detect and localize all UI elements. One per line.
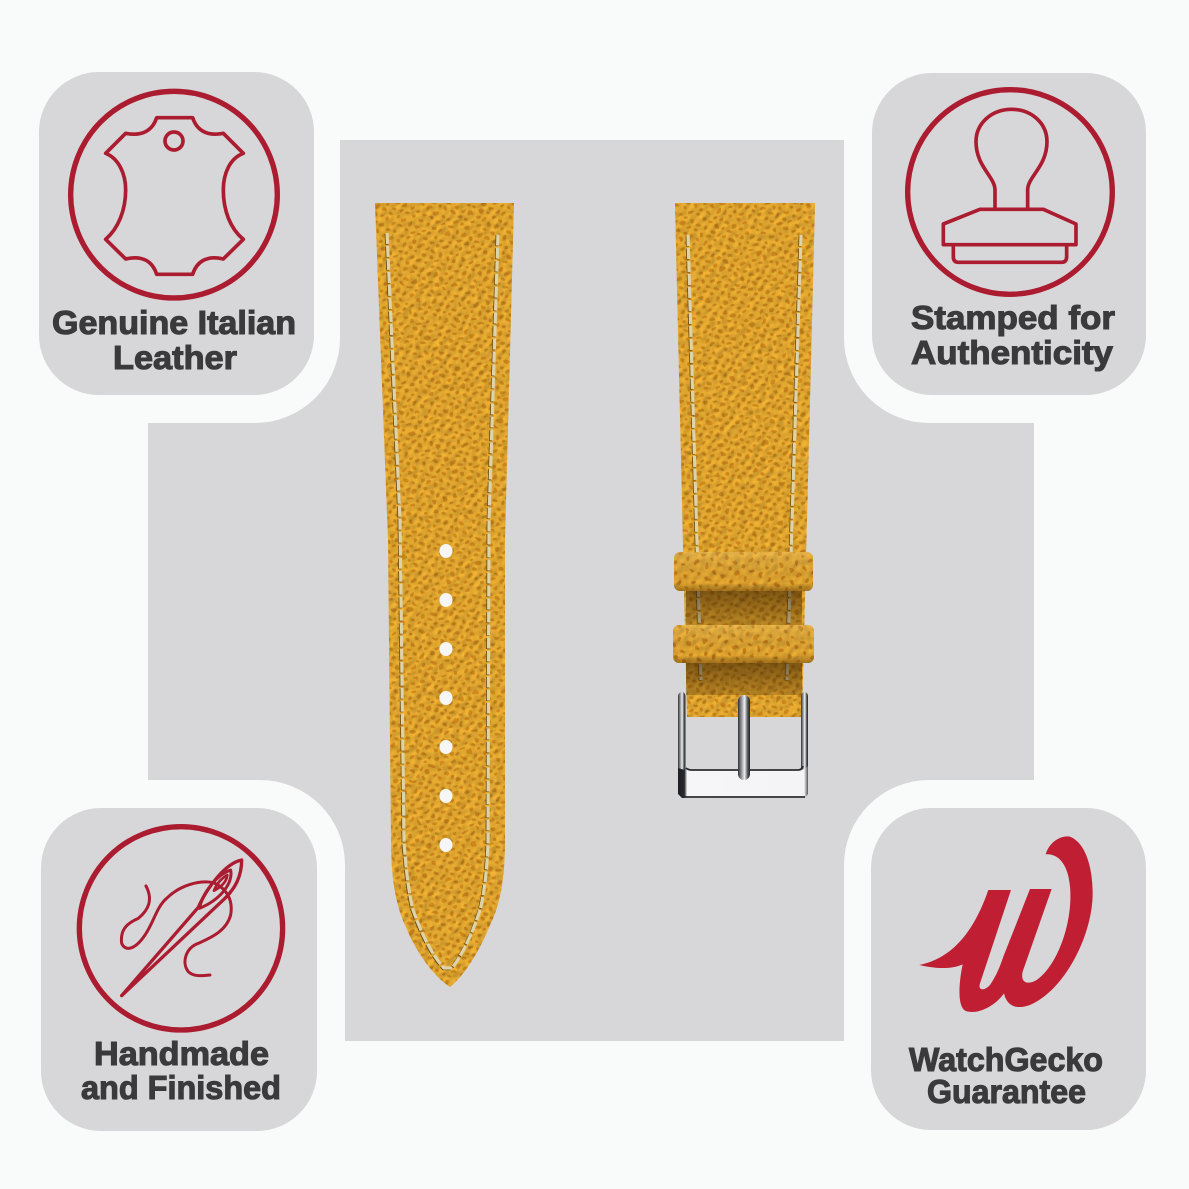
panel: handmade and finished xyxy=(41,808,317,1131)
leather texture: long strap xyxy=(375,203,514,987)
text: stamped for authenticity xyxy=(911,299,1115,371)
icon: needle and thread in circle xyxy=(79,827,283,1030)
leather texture: buckle strap xyxy=(675,203,815,717)
metal buckle xyxy=(678,692,808,798)
white halo: top right xyxy=(844,0,1189,423)
shadow between keepers xyxy=(686,591,802,625)
text: genuine italian leather: Genuine Italian xyxy=(52,304,296,341)
keeper shading: upper xyxy=(674,552,813,591)
icon: watchgecko w logo xyxy=(919,836,1093,1012)
shadow below keeper xyxy=(686,663,802,695)
text: handmade and finished: and Finished xyxy=(81,1069,281,1106)
icon: leather hide in circle xyxy=(71,91,277,298)
text: watchgecko guarantee: WatchGecko xyxy=(909,1041,1103,1078)
white halo: bottom right xyxy=(844,780,1189,1189)
strap holes xyxy=(440,544,452,852)
text: stamped for authenticity: Authenticity xyxy=(911,334,1114,371)
text: handmade and finished: Handmade xyxy=(94,1035,269,1072)
text: genuine italian leather: Leather xyxy=(113,339,237,376)
buckle strap piece xyxy=(673,203,815,717)
stitching: long strap xyxy=(387,233,498,968)
text: watchgecko guarantee xyxy=(909,1041,1103,1110)
white halo: bottom left xyxy=(0,780,345,1189)
buckle right bar xyxy=(801,692,808,772)
central grey cross panel xyxy=(148,140,1034,1041)
text: watchgecko guarantee: Guarantee xyxy=(927,1073,1086,1110)
text: genuine italian leather xyxy=(52,304,296,376)
long strap piece xyxy=(375,203,514,987)
buckle bottom plate xyxy=(678,766,808,798)
white halo: top left xyxy=(0,0,340,423)
panel: stamped for authenticity xyxy=(872,73,1146,395)
stitching shadow: buckle strap xyxy=(687,236,800,681)
stitching shadow: long strap xyxy=(386,234,497,969)
icon: stamp in circle xyxy=(908,90,1112,294)
stitching: buckle strap xyxy=(688,235,801,680)
buckle left bar xyxy=(678,692,686,772)
text: handmade and finished xyxy=(81,1035,281,1106)
keeper loops xyxy=(673,552,814,663)
buckle pin xyxy=(738,695,750,780)
panel: watchgecko guarantee xyxy=(871,808,1146,1130)
panel: genuine italian leather xyxy=(39,72,314,395)
keeper shading: lower xyxy=(673,625,814,663)
text: stamped for authenticity: Stamped for xyxy=(911,299,1115,336)
